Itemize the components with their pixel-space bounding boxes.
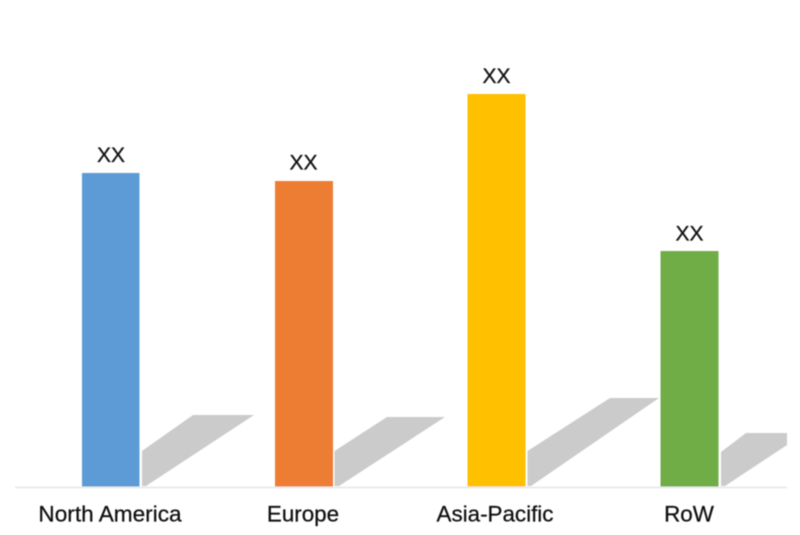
bar: Europe (275, 181, 333, 486)
category label: Europe: Europe (267, 502, 339, 526)
category label: North America: North America (38, 502, 182, 526)
value label: Europe: XX (289, 152, 318, 174)
shadow: North America (142, 415, 254, 486)
category label: Asia-Pacific: Asia-Pacific (437, 502, 553, 526)
value label: Asia-Pacific: XX (482, 65, 511, 88)
shadow: Europe (334, 417, 445, 486)
axis line (15, 486, 787, 488)
value label: North America: XX (97, 144, 125, 167)
bar: North America (82, 173, 140, 486)
category label: RoW: RoW (664, 502, 715, 526)
value label: RoW: XX (675, 222, 704, 246)
shadow: Asia-Pacific (528, 398, 659, 486)
bar: RoW (660, 251, 718, 486)
shadow: RoW (721, 433, 787, 486)
bar: Asia-Pacific (468, 94, 526, 486)
